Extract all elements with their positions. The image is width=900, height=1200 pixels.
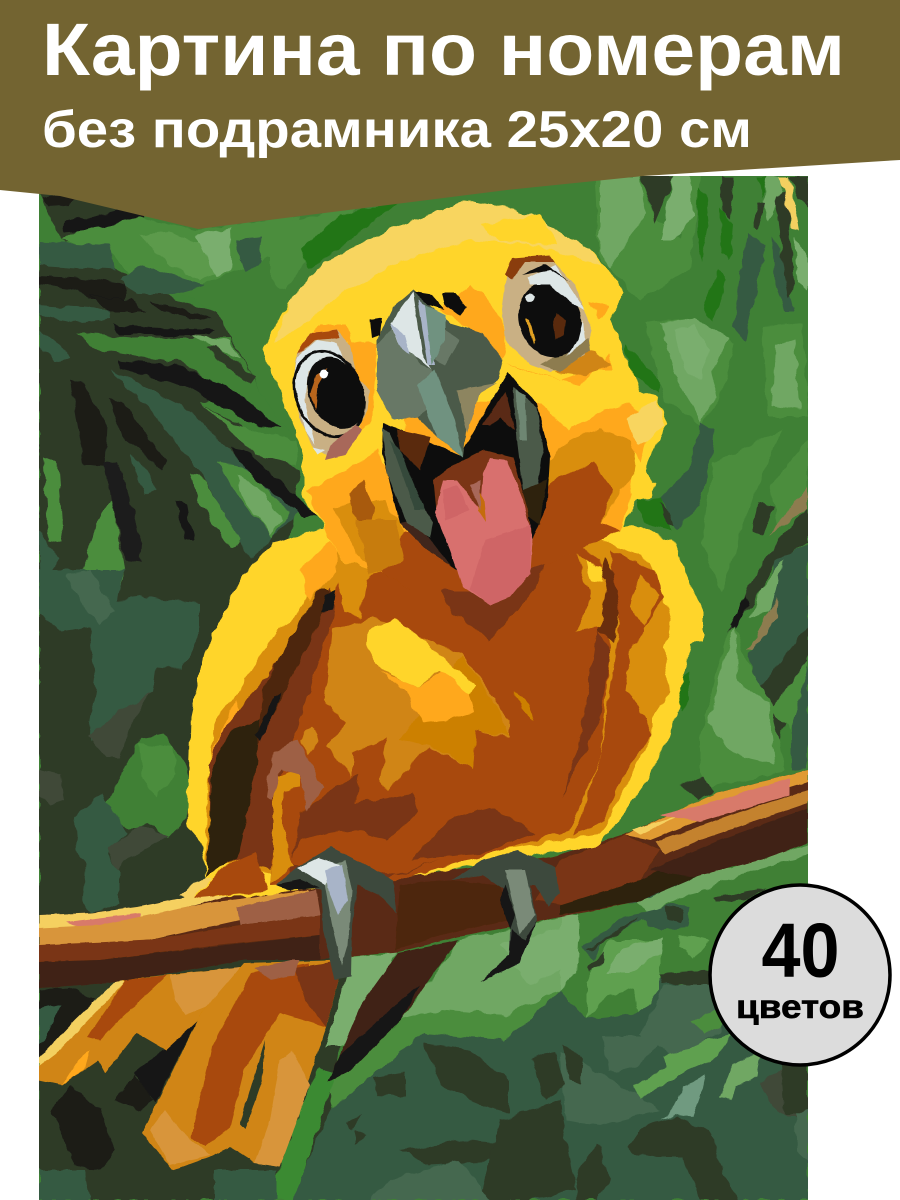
badge label: цветов [736,988,864,1025]
badge: 40 colours [710,885,890,1065]
painting: parrot on a branch [39,176,808,1200]
left jungle foliage [39,190,400,1200]
parrot open mouth and lower beak [382,372,550,590]
right jungle foliage [595,176,808,800]
parrot body and wings [180,520,703,900]
title line 2: без подрамника 25х20 см [42,101,752,159]
title line 1: Картина по номерам [42,8,845,91]
parrot right eye [502,255,592,372]
parrot claws [276,847,559,982]
badge number: 40 [762,908,840,994]
header banner [0,0,900,229]
parrot tail feathers [39,940,459,1170]
lower jungle foliage [39,845,808,1200]
parrot left eye [292,330,370,460]
parrot head [262,200,667,590]
branch [39,770,808,988]
parrot upper beak [370,290,503,457]
parrot tongue [435,458,532,605]
